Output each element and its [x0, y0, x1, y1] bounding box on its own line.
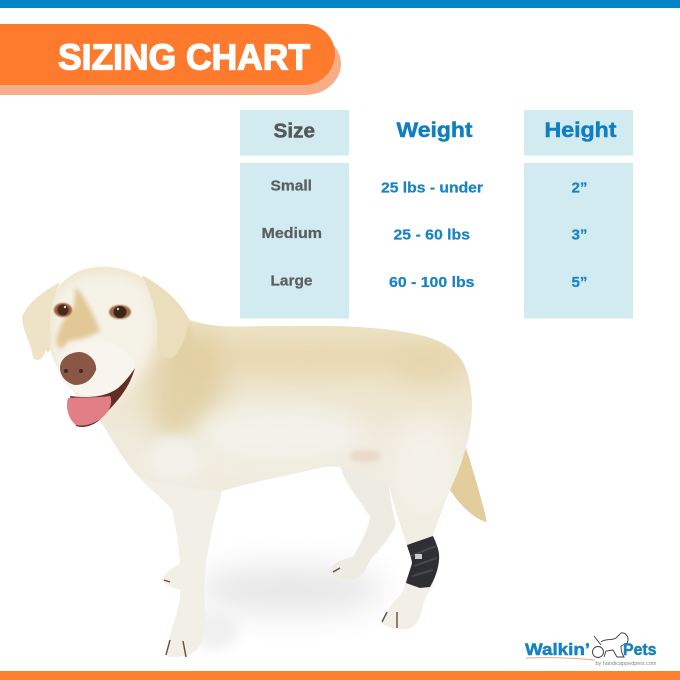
size heading: Size: [274, 120, 315, 142]
weight heading: Weight: [396, 119, 473, 142]
mouth: [70, 368, 135, 427]
right ear: [142, 275, 188, 358]
small weight: 25 lbs - under: [381, 180, 483, 196]
banner pill: [0, 24, 335, 85]
left eye: [54, 303, 72, 317]
dog photo illustration: [22, 267, 487, 657]
height header cell: [524, 110, 633, 156]
neck shadow under ear: [172, 320, 192, 372]
tagline: by handicappedpets.com: [596, 661, 657, 667]
tail: [450, 448, 487, 522]
sizing table: [240, 110, 633, 318]
bottom bar: [0, 671, 680, 680]
medium weight: 25 - 60 lbs: [394, 228, 470, 244]
top bar: [0, 0, 680, 8]
far rear leg: [329, 465, 396, 579]
tongue: [67, 396, 111, 426]
swoosh: [526, 658, 595, 660]
fur shading: [50, 274, 466, 520]
size column cell: [240, 163, 349, 318]
title banner: [0, 24, 341, 95]
left ear: [22, 282, 60, 360]
icon: dog in wheelchair: [592, 633, 628, 658]
nostrils: [64, 369, 83, 373]
right eye: [109, 305, 131, 319]
small height: 2”: [572, 180, 588, 196]
white face: [50, 274, 156, 406]
small label: Small: [270, 178, 312, 194]
muzzle: [59, 340, 135, 396]
size header cell: [240, 110, 349, 156]
brace tag: [415, 554, 422, 559]
large height: 5”: [572, 275, 588, 291]
nose: [60, 352, 96, 385]
body and head base: [48, 267, 472, 545]
leg brace: [406, 536, 439, 588]
height heading: Height: [544, 119, 617, 142]
far front paw: [162, 563, 182, 590]
near front leg: [140, 478, 222, 657]
medium label: Medium: [262, 226, 322, 242]
paw toes: [164, 568, 397, 657]
banner shadow: [0, 33, 341, 95]
ground shadow: [191, 566, 385, 650]
height column cell: [524, 163, 633, 318]
medium height: 3”: [572, 228, 588, 244]
Walkin text: Walkin’: [525, 641, 590, 659]
title: SIZING CHART: [58, 36, 310, 78]
forehead tan patch: [56, 287, 100, 348]
logo: [525, 633, 657, 667]
near rear leg and foot: [381, 480, 433, 629]
large weight: 60 - 100 lbs: [389, 275, 474, 291]
large label: Large: [270, 274, 312, 290]
Pets text: Pets: [623, 641, 656, 659]
